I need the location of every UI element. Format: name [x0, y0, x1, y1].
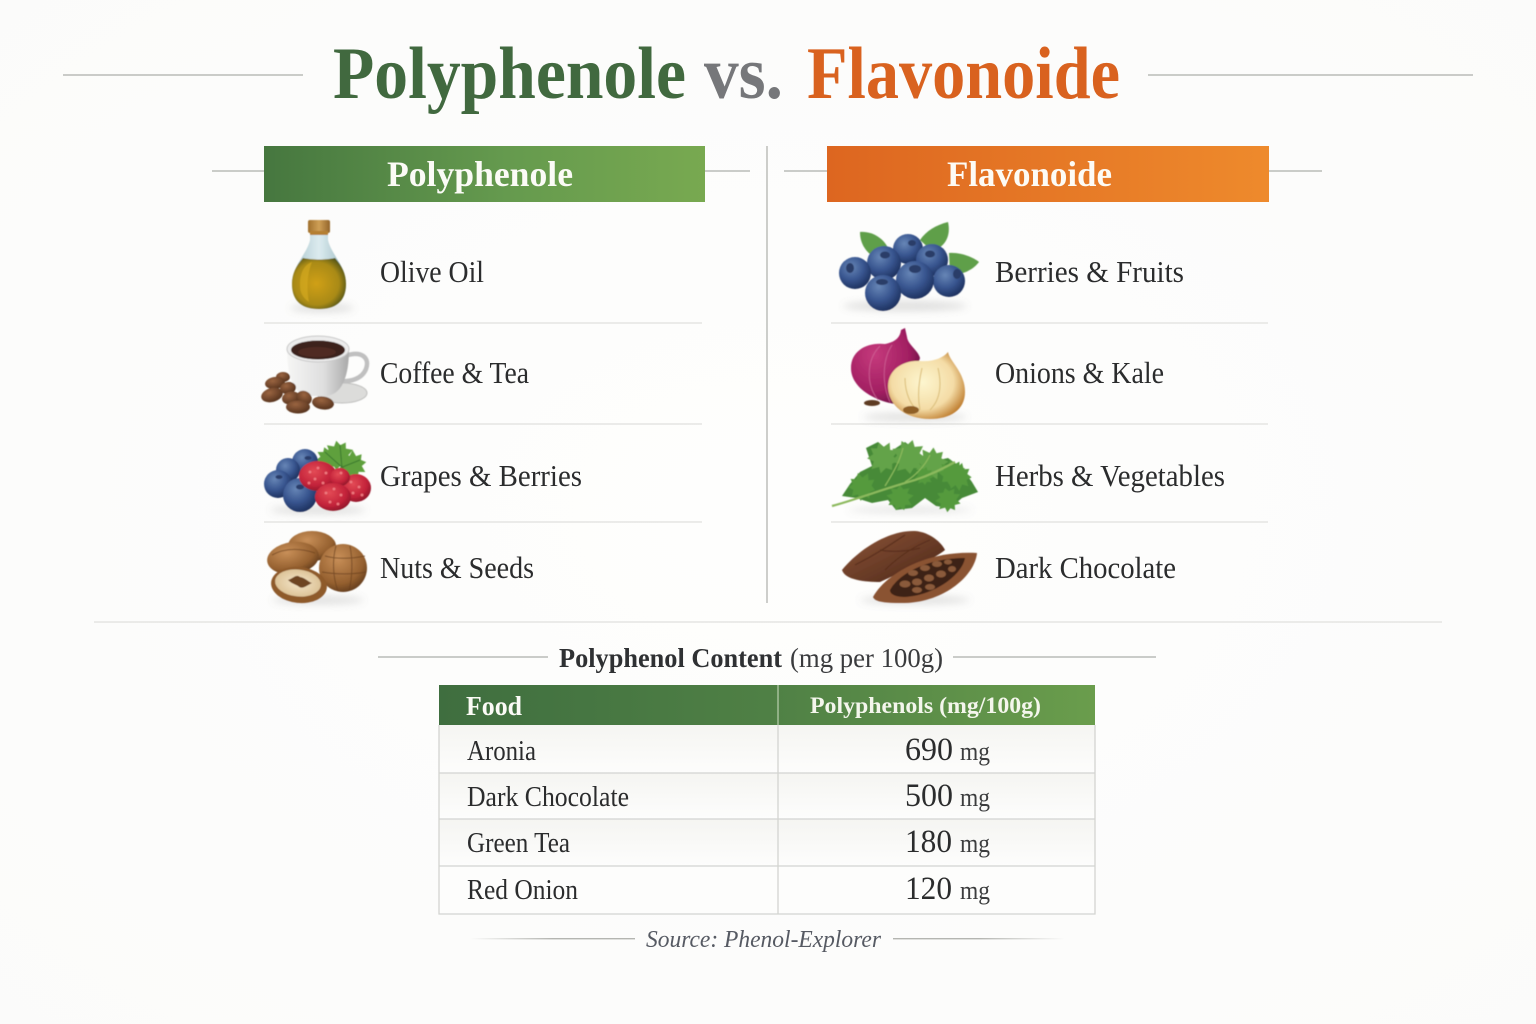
text: Herbs & Vegetables: Herbs & Vegetables [995, 458, 1225, 493]
text: Nuts & Seeds: Nuts & Seeds [380, 550, 534, 585]
row: Dark Chocolate [467, 778, 990, 814]
row: Green Tea: 180 [905, 824, 952, 860]
row: Dark Chocolate: mg [960, 783, 990, 812]
row: Aronia: mg [960, 737, 990, 766]
table: polyphenol content [439, 685, 1095, 914]
text: Dark Chocolate: Dark Chocolate [995, 550, 1176, 585]
row: Red Onion: mg [960, 876, 990, 905]
panel: Polyphenole [212, 146, 750, 606]
icon: blueberries [839, 222, 979, 311]
row: Red Onion: Red Onion [467, 875, 578, 906]
heading: Polyphenole: Polyphenole [387, 154, 573, 194]
row: Aronia [467, 732, 990, 768]
text: Berries & Fruits: Berries & Fruits [995, 254, 1184, 289]
text: Grapes & Berries: Grapes & Berries [380, 458, 582, 493]
row: Green Tea: mg [960, 829, 990, 858]
row: Dark Chocolate: 500 [905, 778, 953, 814]
row: Aronia: Aronia [467, 736, 536, 767]
foliage mass [842, 442, 978, 510]
icon: coffee cup and beans [260, 336, 367, 414]
panel: Flavonoide [784, 146, 1322, 604]
title: Polyphenole [333, 33, 686, 115]
row: Dark Chocolate: Dark Chocolate [467, 782, 629, 813]
heading: Polyphenole [212, 146, 750, 202]
icon: grapes and berries [264, 439, 371, 514]
icon: cacao pods [842, 531, 977, 604]
title: Flavonoide [807, 33, 1120, 115]
table heading [378, 643, 1156, 673]
icon: nuts [265, 531, 367, 606]
text: Olive Oil: Olive Oil [380, 254, 484, 289]
source note: Source: Phenol-Explorer [646, 927, 882, 953]
icon: olive oil bottle [290, 220, 354, 312]
icon: herbs [832, 436, 978, 515]
row: Green Tea [467, 824, 990, 860]
text: Onions & Kale: Onions & Kale [995, 355, 1164, 390]
title [63, 33, 1473, 115]
row: Aronia: 690 [905, 732, 953, 768]
table header: Food [466, 691, 522, 721]
icon: onions [851, 328, 967, 421]
row: Red Onion [467, 871, 990, 907]
heading: Flavonoide [784, 146, 1322, 202]
table heading: (mg per 100g) [790, 643, 943, 673]
table heading: Polyphenol Content [559, 643, 782, 673]
title: vs. [704, 33, 783, 115]
heading: Flavonoide: Flavonoide [947, 154, 1112, 194]
center column divider [766, 146, 768, 603]
table header [439, 685, 1095, 725]
row: Red Onion: 120 [905, 871, 952, 907]
text: Coffee & Tea: Coffee & Tea [380, 355, 529, 390]
row: Green Tea: Green Tea [467, 828, 571, 859]
table header: Polyphenols (mg/100g) [810, 693, 1041, 718]
